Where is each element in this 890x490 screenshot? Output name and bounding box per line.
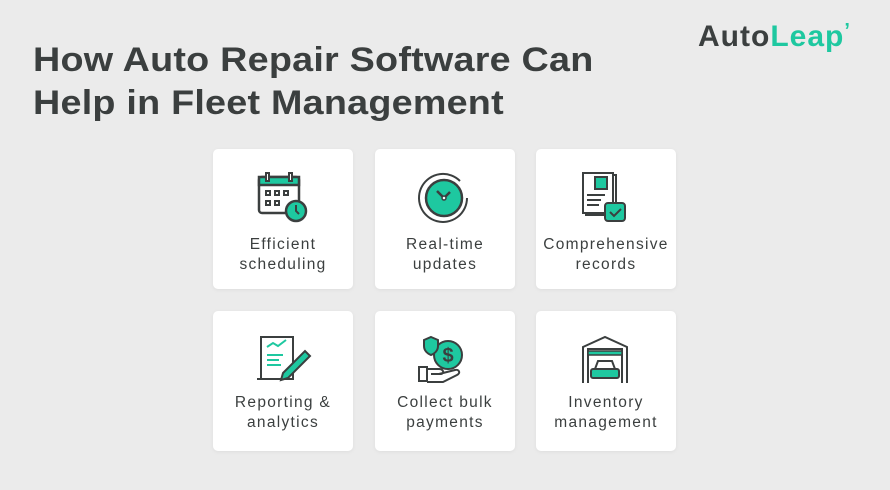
card: real-time updates: Real-time [406,236,484,253]
card: inventory management: management [554,414,658,430]
card: collect bulk payments: Collect bulk [397,394,493,411]
title: Help in Fleet Management [33,84,504,122]
card: efficient scheduling: scheduling [239,256,327,272]
icon: report with pen [257,336,312,382]
card: collect bulk payments [375,311,515,451]
card: comprehensive records [536,149,676,289]
icon: clock [418,172,468,223]
card: real-time updates: updates [413,256,477,272]
card: inventory management: Inventory [568,394,644,411]
icon: calendar [258,172,308,222]
card: reporting & analytics [213,311,353,451]
card: collect bulk payments: payments [406,414,484,430]
card: reporting & analytics: Reporting & [235,394,331,411]
icon: hand with coin: $ [442,345,454,367]
card: inventory management [536,311,676,451]
title [33,41,593,122]
icon: garage with car [582,336,628,383]
title: How Auto Repair Software Can [33,41,593,79]
card: efficient scheduling: Efficient [250,236,316,253]
icon: hand with coin [418,336,463,383]
card: comprehensive records: Comprehensive [543,236,669,253]
card: real-time updates [375,149,515,289]
card: efficient scheduling [213,149,353,289]
card: reporting & analytics: analytics [247,414,319,430]
icon: documents [582,172,626,222]
card: comprehensive records: records [576,256,636,272]
logo: AutoLeap’ [698,20,851,53]
